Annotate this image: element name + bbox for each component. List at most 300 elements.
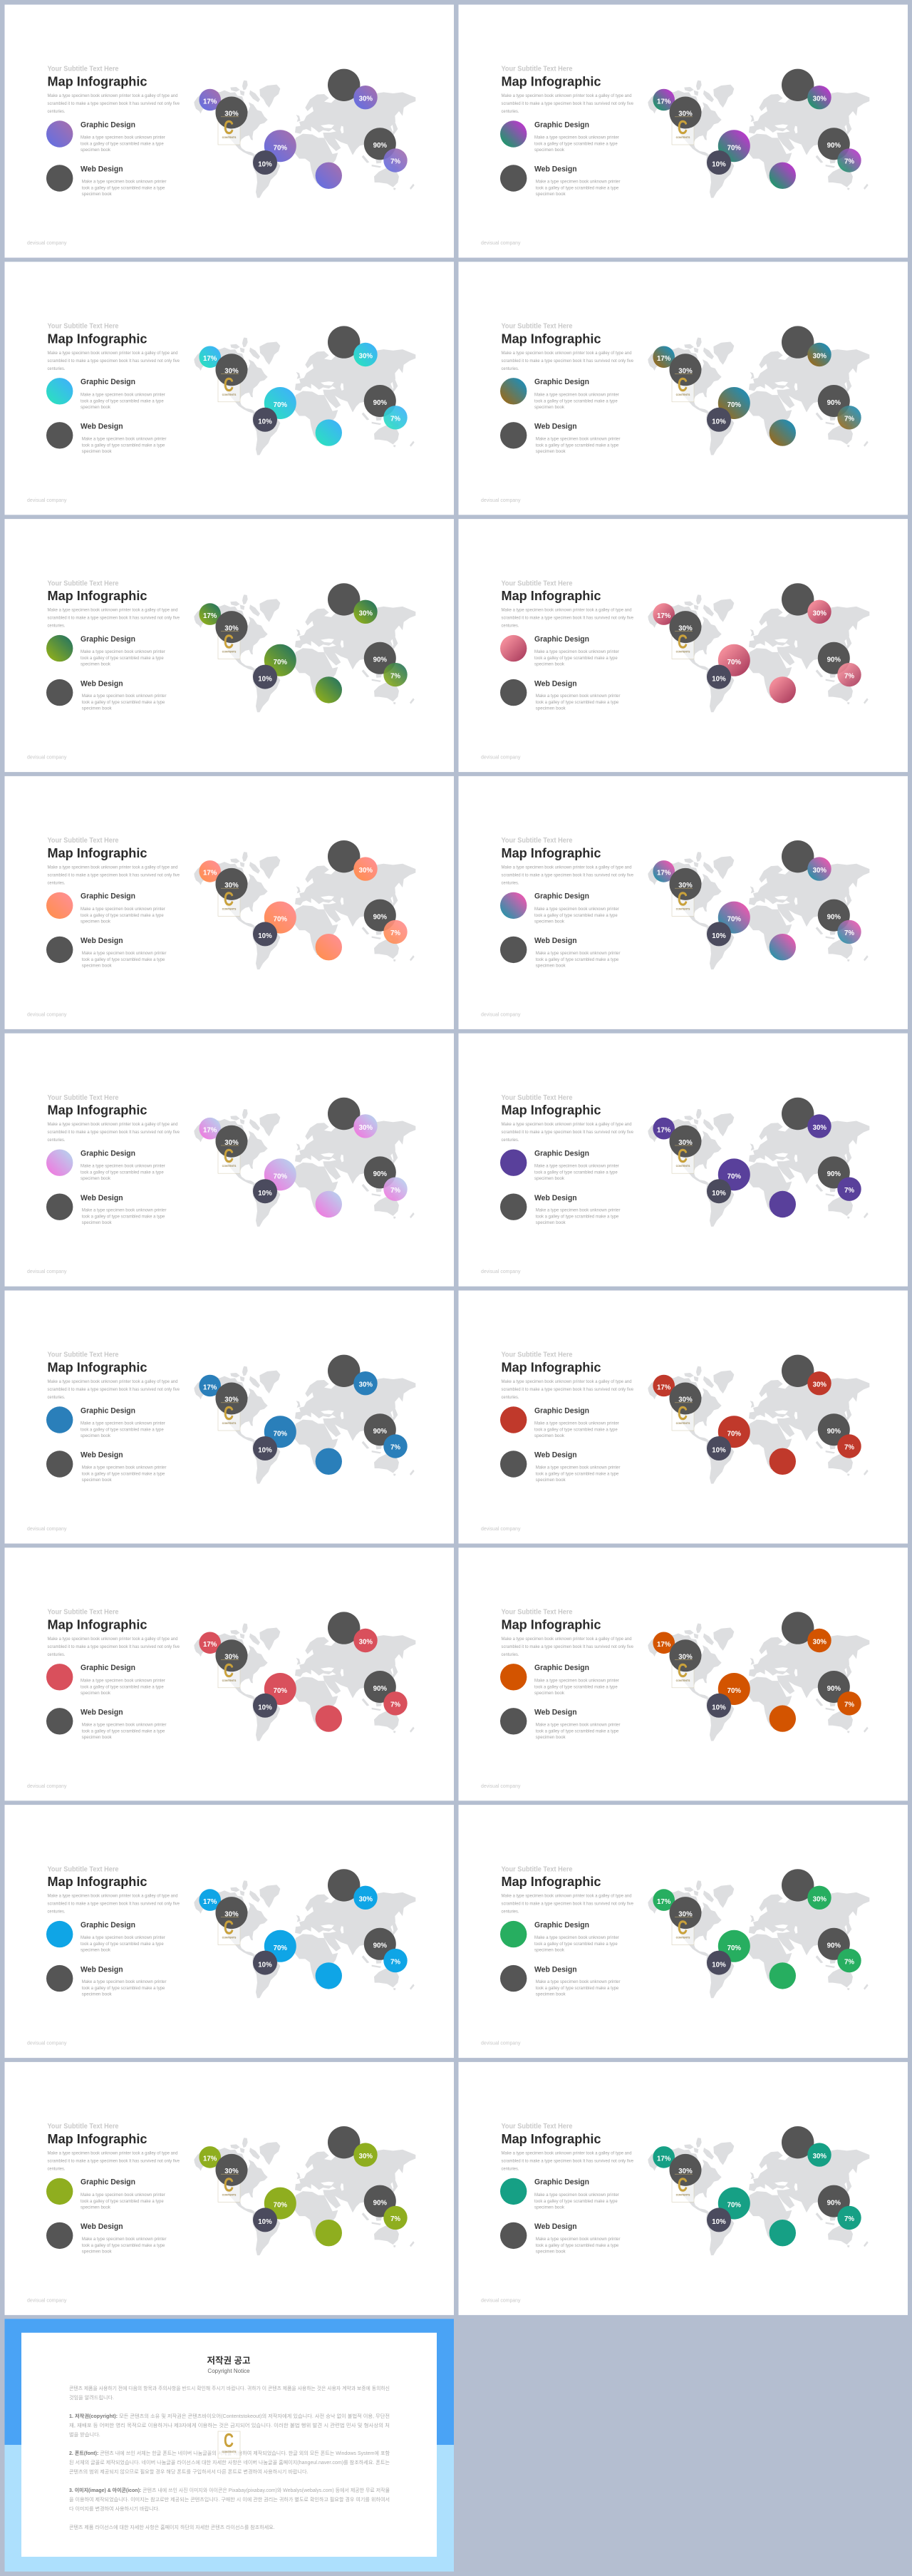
notice section 3: 을 이용하여 제작되었습니다. 이미지는 참고로만 제공되는 콘텐츠입니다. 구매한 시 이에 관한 권리는 귀하가 별도로 확인하고 필요할 경우 여기를 위하여서 bbox=[69, 2496, 390, 2503]
legend: web design: took a galley of type scrambled make a type bbox=[82, 1473, 165, 1477]
watermark logo: C bbox=[678, 631, 688, 653]
world map bbox=[648, 1109, 869, 1227]
legend: web design: took a galley of type scrambled make a type bbox=[536, 443, 619, 448]
legend icon: web design bbox=[500, 1451, 527, 1478]
legend: graphic design: Make a type specimen book unknown printer bbox=[534, 1165, 619, 1169]
legend: graphic design bbox=[81, 635, 165, 667]
legend: graphic design: took a galley of type scrambled make a type bbox=[534, 143, 618, 147]
map bubbles: 70% bbox=[274, 2202, 287, 2210]
legend: graphic design bbox=[534, 1149, 619, 1181]
legend: web design bbox=[81, 679, 167, 711]
map bubbles: 10% bbox=[258, 1961, 272, 1969]
intro text bbox=[502, 1380, 634, 1400]
watermark logo: CONTENTS bbox=[676, 136, 690, 139]
watermark frame bbox=[672, 1403, 694, 1431]
title: Map Infographic bbox=[502, 845, 601, 860]
map bubbles: 30% bbox=[813, 609, 826, 617]
intro text: centuries. bbox=[502, 367, 519, 371]
map bubbles: 7% bbox=[844, 415, 854, 423]
legend: graphic design bbox=[534, 120, 619, 153]
legend: graphic design bbox=[81, 1921, 165, 1953]
map bubbles: 7% bbox=[390, 929, 400, 937]
legend: graphic design bbox=[534, 892, 619, 924]
legend: web design: Make a type specimen book unknown printer bbox=[536, 1209, 620, 1213]
map bubbles: 90% bbox=[827, 142, 841, 150]
watermark logo: CONTENTS bbox=[222, 2193, 237, 2196]
footer: devisual company bbox=[481, 239, 521, 246]
legend: graphic design: Make a type specimen book unknown printer bbox=[534, 2193, 619, 2198]
intro text bbox=[47, 1380, 180, 1400]
legend: graphic design: Make a type specimen book unknown printer bbox=[81, 1679, 165, 1683]
map bubbles: 70% bbox=[274, 1173, 287, 1180]
watermark frame bbox=[218, 2175, 240, 2202]
map bubbles: 90% bbox=[827, 1428, 841, 1436]
map bubbles bbox=[199, 583, 408, 704]
watermark logo: CONTENTS bbox=[222, 393, 237, 396]
panel: slide 16 green bbox=[459, 1805, 908, 2058]
legend icon: web design bbox=[46, 679, 73, 706]
title: Map Infographic bbox=[47, 1360, 147, 1374]
map bubbles: 17% bbox=[203, 1384, 217, 1391]
world map bbox=[648, 337, 869, 455]
intro text: centuries. bbox=[47, 1396, 66, 1400]
intro text: scrambled it to make a type specimen book It has survived not only five bbox=[47, 1645, 180, 1649]
map bubbles: 30% bbox=[813, 352, 826, 360]
legend: graphic design: specimen book bbox=[534, 663, 565, 667]
legend: web design: Web Design bbox=[81, 1709, 123, 1717]
intro text: Make a type specimen book unknown printer took a galley of type and bbox=[47, 2151, 178, 2155]
map bubbles: 17% bbox=[657, 870, 671, 877]
legend: web design: took a galley of type scrambled make a type bbox=[536, 1215, 619, 1220]
legend icon: graphic design bbox=[46, 1406, 73, 1433]
watermark frame bbox=[218, 375, 240, 402]
watermark logo: C bbox=[224, 373, 234, 396]
intro text: centuries. bbox=[47, 367, 66, 371]
notice intro bbox=[69, 2385, 390, 2401]
legend: web design: Make a type specimen book unknown printer bbox=[82, 1980, 167, 1984]
map bubbles: 30% bbox=[224, 1654, 239, 1661]
legend icon: web design bbox=[46, 2222, 73, 2249]
map bubbles: 7% bbox=[390, 415, 400, 423]
world map bbox=[648, 2138, 869, 2255]
legend: graphic design: Graphic Design bbox=[81, 1664, 135, 1672]
map bubbles: 70% bbox=[727, 1430, 741, 1438]
legend icon: graphic design bbox=[46, 1664, 73, 1691]
map bubbles: 70% bbox=[727, 144, 741, 152]
intro text: centuries. bbox=[502, 110, 519, 114]
legend: web design: took a galley of type scrambled make a type bbox=[82, 1215, 165, 1220]
watermark logo: C bbox=[678, 887, 688, 910]
map bubbles: 10% bbox=[712, 1961, 726, 1969]
legend: graphic design: took a galley of type scrambled make a type bbox=[81, 1171, 164, 1175]
panel: slide 2 magenta green gradient bbox=[459, 4, 908, 258]
intro text bbox=[502, 1895, 634, 1915]
map bubbles: 30% bbox=[813, 96, 826, 103]
legend: graphic design: Graphic Design bbox=[81, 120, 135, 129]
title: Map Infographic bbox=[502, 1874, 601, 1889]
watermark logo: CONTENTS bbox=[222, 1165, 237, 1168]
map bubbles: 7% bbox=[844, 158, 854, 166]
intro text: scrambled it to make a type specimen book It has survived not only five bbox=[502, 1902, 634, 1907]
legend: web design: specimen book bbox=[82, 964, 113, 968]
watermark logo: C bbox=[678, 2173, 688, 2195]
legend: web design: Web Design bbox=[81, 1965, 123, 1974]
title: Map Infographic bbox=[47, 2131, 147, 2146]
map bubbles: 30% bbox=[678, 1910, 693, 1918]
intro text: scrambled it to make a type specimen book It has survived not only five bbox=[502, 359, 634, 364]
map bubbles bbox=[199, 1355, 408, 1475]
map bubbles: 7% bbox=[390, 672, 400, 680]
intro text bbox=[47, 1123, 180, 1143]
world map bbox=[648, 81, 869, 198]
map bubbles: 30% bbox=[359, 352, 373, 360]
legend: graphic design bbox=[534, 635, 619, 667]
legend: web design: Make a type specimen book unknown printer bbox=[82, 694, 167, 699]
intro text: Make a type specimen book unknown printer took a galley of type and bbox=[502, 2151, 631, 2155]
map bubbles: 90% bbox=[373, 1428, 387, 1436]
map bubbles: 90% bbox=[827, 913, 841, 921]
legend: graphic design bbox=[534, 1664, 619, 1696]
watermark logo: CONTENTS bbox=[222, 136, 237, 139]
map bubbles: 70% bbox=[727, 659, 741, 666]
legend: graphic design: took a galley of type scrambled make a type bbox=[81, 1685, 164, 1689]
subtitle: Your Subtitle Text Here bbox=[502, 322, 573, 330]
map bubbles: 90% bbox=[373, 399, 387, 407]
intro text: scrambled it to make a type specimen book It has survived not only five bbox=[502, 873, 634, 877]
legend: graphic design: Graphic Design bbox=[534, 1921, 589, 1930]
intro text: Make a type specimen book unknown printer took a galley of type and bbox=[502, 865, 631, 870]
legend icon: web design bbox=[46, 165, 73, 192]
legend: web design bbox=[81, 1451, 167, 1483]
intro text: centuries. bbox=[502, 1910, 519, 1915]
watermark frame bbox=[218, 1661, 240, 1688]
legend: web design: specimen book bbox=[536, 450, 566, 454]
legend: web design: specimen book bbox=[536, 1478, 566, 1483]
map bubbles: 7% bbox=[844, 1958, 854, 1966]
legend: graphic design: Graphic Design bbox=[534, 378, 589, 386]
map bubbles: 30% bbox=[359, 1639, 373, 1647]
map bubbles: 30% bbox=[678, 110, 693, 118]
legend: web design: Make a type specimen book unknown printer bbox=[536, 1723, 620, 1727]
intro text bbox=[502, 609, 634, 629]
map bubbles: 30% bbox=[224, 624, 239, 632]
map bubbles bbox=[199, 326, 408, 446]
notice closing line: 콘텐츠 제품 라이선스에 대한 자세한 사항은 홈페이지 하단의 자세한 콘텐츠 라이선스를 참조하세요. bbox=[69, 2524, 275, 2530]
intro text: Make a type specimen book unknown printer took a galley of type and bbox=[47, 1637, 178, 1642]
notice section 1: 벌을 받습니다. bbox=[69, 2431, 100, 2438]
legend: web design: specimen book bbox=[536, 1993, 566, 1997]
legend: web design: Web Design bbox=[534, 679, 577, 688]
footer: devisual company bbox=[27, 1268, 67, 1274]
map bubbles: 7% bbox=[390, 1444, 400, 1452]
legend icon: web design bbox=[500, 1193, 527, 1220]
legend: web design bbox=[81, 1708, 167, 1740]
intro text: centuries. bbox=[502, 881, 519, 885]
watermark: C bbox=[224, 2429, 234, 2451]
watermark logo: CONTENTS bbox=[222, 907, 237, 910]
panel: slide 13 rose red bbox=[4, 1547, 454, 1800]
intro text bbox=[47, 1895, 180, 1915]
legend: graphic design: Make a type specimen book unknown printer bbox=[81, 1165, 165, 1169]
title: Map Infographic bbox=[502, 1103, 601, 1118]
legend: graphic design bbox=[81, 1149, 165, 1181]
notice section 3: 다 이미지를 변경하여 사용하시기 바랍니다. bbox=[69, 2505, 160, 2512]
legend: web design: Make a type specimen book unknown printer bbox=[536, 1980, 620, 1984]
intro text bbox=[502, 1637, 634, 1657]
legend: graphic design: Graphic Design bbox=[81, 1149, 135, 1158]
legend: graphic design: Make a type specimen book unknown printer bbox=[534, 1936, 619, 1940]
map bubbles: 30% bbox=[678, 367, 693, 375]
intro text: centuries. bbox=[502, 1396, 519, 1400]
legend: web design: Web Design bbox=[81, 1194, 123, 1202]
watermark frame bbox=[218, 1403, 240, 1431]
watermark frame bbox=[672, 1918, 694, 1945]
intro text: Make a type specimen book unknown printer took a galley of type and bbox=[502, 1895, 631, 1899]
legend: web design bbox=[81, 165, 167, 197]
legend: graphic design: specimen book bbox=[534, 406, 565, 410]
map bubbles: 30% bbox=[678, 1139, 693, 1147]
watermark logo: CONTENTS bbox=[222, 1679, 237, 1682]
subtitle: Your Subtitle Text Here bbox=[502, 1865, 573, 1873]
watermark frame bbox=[672, 1146, 694, 1173]
map bubbles: 90% bbox=[373, 1942, 387, 1950]
legend icon: web design bbox=[500, 679, 527, 706]
notice section 2: 콘텐츠의 범위 제공되지 않으므로 필요할 경우 해당 폰트를 구입하셔서 다른 폰트로 변경하여 사용하시기 바랍니다. bbox=[69, 2468, 309, 2475]
intro text: scrambled it to make a type specimen book It has survived not only five bbox=[47, 1130, 180, 1135]
subtitle: Your Subtitle Text Here bbox=[502, 1609, 573, 1617]
watermark logo: C bbox=[224, 2173, 234, 2195]
intro text bbox=[47, 2151, 180, 2171]
legend: web design bbox=[534, 679, 620, 711]
legend: graphic design: Graphic Design bbox=[81, 1921, 135, 1930]
legend: web design: Make a type specimen book unknown printer bbox=[536, 437, 620, 441]
legend: graphic design: Make a type specimen book unknown printer bbox=[81, 907, 165, 912]
legend: web design: Make a type specimen book unknown printer bbox=[82, 180, 167, 184]
panel: slide 15 sky blue bbox=[4, 1805, 454, 2058]
panel: slide 11 blue bbox=[4, 1290, 454, 1544]
watermark frame bbox=[672, 632, 694, 659]
legend: web design: took a galley of type scrambled make a type bbox=[536, 958, 619, 962]
legend: web design: Make a type specimen book unknown printer bbox=[536, 1465, 620, 1470]
map bubbles: 30% bbox=[224, 110, 239, 118]
intro text: scrambled it to make a type specimen book It has survived not only five bbox=[502, 1130, 634, 1135]
map bubbles: 30% bbox=[678, 1654, 693, 1661]
map bubbles: 30% bbox=[813, 1639, 826, 1647]
watermark logo: C bbox=[678, 1659, 688, 1681]
intro text: scrambled it to make a type specimen book It has survived not only five bbox=[502, 2159, 634, 2163]
map bubbles: 70% bbox=[727, 2202, 741, 2210]
legend: web design: specimen book bbox=[82, 450, 113, 454]
watermark frame bbox=[672, 2175, 694, 2202]
panel: slide 18 teal bbox=[459, 2062, 908, 2315]
map bubbles bbox=[653, 69, 861, 189]
legend icon: graphic design bbox=[500, 1406, 527, 1433]
map bubbles: 17% bbox=[203, 355, 217, 363]
legend: graphic design: Graphic Design bbox=[534, 1406, 589, 1415]
legend: web design bbox=[534, 1708, 620, 1740]
legend icon: graphic design bbox=[500, 892, 527, 919]
world map bbox=[194, 337, 415, 455]
map bubbles: 17% bbox=[203, 870, 217, 877]
legend: graphic design: Graphic Design bbox=[81, 1406, 135, 1415]
map bubbles: 17% bbox=[203, 2155, 217, 2163]
notice intro: 것임을 알려드립니다. bbox=[69, 2394, 114, 2401]
legend: web design bbox=[81, 2222, 167, 2254]
map bubbles: 90% bbox=[827, 399, 841, 407]
map bubbles: 30% bbox=[224, 1139, 239, 1147]
legend: web design: Make a type specimen book unknown printer bbox=[536, 180, 620, 184]
intro text: Make a type specimen book unknown printer took a galley of type and bbox=[47, 351, 178, 356]
map bubbles: 7% bbox=[390, 1187, 400, 1195]
legend: graphic design: Graphic Design bbox=[534, 635, 589, 644]
footer: devisual company bbox=[27, 754, 67, 761]
legend: graphic design: specimen book bbox=[534, 1949, 565, 1953]
legend: graphic design bbox=[81, 378, 165, 410]
footer: devisual company bbox=[481, 754, 521, 761]
footer: devisual company bbox=[27, 2040, 67, 2046]
legend: web design bbox=[534, 1194, 620, 1225]
footer: devisual company bbox=[27, 1783, 67, 1789]
legend: graphic design: Graphic Design bbox=[81, 378, 135, 386]
legend: graphic design: specimen book bbox=[534, 2205, 565, 2210]
subtitle: Your Subtitle Text Here bbox=[502, 2123, 573, 2131]
subtitle: Your Subtitle Text Here bbox=[47, 1865, 119, 1873]
map bubbles: 17% bbox=[657, 1126, 671, 1134]
map bubbles: 17% bbox=[203, 1126, 217, 1134]
panel: slide 14 orange bbox=[459, 1547, 908, 1800]
map bubbles: 30% bbox=[813, 1381, 826, 1389]
map bubbles: 10% bbox=[258, 161, 272, 169]
notice section 1: 1. 저작권(copyright): 모든 콘텐츠의 소유 및 저작권은 콘텐츠바이오어(Contentstokeout)의 저작자에게 있습니다. 사전 승낙 없이 불법적 이용, 무단전 bbox=[69, 2413, 390, 2419]
map bubbles: 70% bbox=[274, 401, 287, 409]
legend: web design bbox=[534, 422, 620, 454]
footer: devisual company bbox=[481, 1783, 521, 1789]
legend: web design: specimen book bbox=[536, 707, 566, 711]
intro text bbox=[502, 2151, 634, 2171]
legend: graphic design bbox=[534, 1921, 619, 1953]
legend: web design: Make a type specimen book unknown printer bbox=[82, 1465, 167, 1470]
legend icon: graphic design bbox=[500, 2178, 527, 2205]
map bubbles: 30% bbox=[678, 1396, 693, 1404]
legend: graphic design: took a galley of type scrambled make a type bbox=[534, 656, 618, 661]
intro text: Make a type specimen book unknown printer took a galley of type and bbox=[502, 1637, 631, 1642]
map bubbles: 10% bbox=[712, 1704, 726, 1712]
map bubbles: 30% bbox=[224, 367, 239, 375]
intro text: scrambled it to make a type specimen book It has survived not only five bbox=[47, 359, 180, 364]
watermark logo: C bbox=[224, 1402, 234, 1424]
legend: web design: specimen book bbox=[82, 1478, 113, 1483]
map bubbles: 70% bbox=[274, 144, 287, 152]
map bubbles: 17% bbox=[203, 1641, 217, 1649]
map bubbles bbox=[653, 2126, 861, 2246]
intro text bbox=[47, 609, 180, 629]
title: Map Infographic bbox=[502, 331, 601, 346]
legend: graphic design: specimen book bbox=[534, 919, 565, 924]
panel: slide 7 coral gradient bbox=[4, 776, 454, 1029]
legend: web design: specimen book bbox=[536, 2250, 566, 2254]
world map bbox=[648, 1880, 869, 1998]
legend: graphic design: took a galley of type scrambled make a type bbox=[534, 399, 618, 403]
legend: web design bbox=[534, 165, 620, 197]
subtitle: Your Subtitle Text Here bbox=[47, 1351, 119, 1359]
subtitle: Your Subtitle Text Here bbox=[47, 1094, 119, 1102]
legend icon: web design bbox=[46, 422, 73, 449]
intro text: Make a type specimen book unknown printer took a galley of type and bbox=[47, 1895, 178, 1899]
footer: devisual company bbox=[27, 2297, 67, 2303]
intro text: scrambled it to make a type specimen book It has survived not only five bbox=[47, 1388, 180, 1392]
intro text: centuries. bbox=[502, 1138, 519, 1143]
legend: graphic design bbox=[81, 2178, 165, 2210]
legend icon: graphic design bbox=[500, 635, 527, 661]
watermark logo: C bbox=[224, 1145, 234, 1167]
legend: graphic design: Make a type specimen book unknown printer bbox=[534, 1421, 619, 1426]
subtitle: Your Subtitle Text Here bbox=[502, 579, 573, 587]
map bubbles: 10% bbox=[712, 161, 726, 169]
legend: graphic design: took a galley of type scrambled make a type bbox=[534, 1171, 618, 1175]
legend: graphic design: Make a type specimen book unknown printer bbox=[81, 135, 165, 140]
world map bbox=[194, 1366, 415, 1484]
watermark logo: CONTENTS bbox=[676, 1422, 690, 1425]
legend: web design bbox=[81, 1194, 167, 1225]
legend: graphic design bbox=[81, 1664, 165, 1696]
watermark logo: CONTENTS bbox=[676, 393, 690, 396]
map bubbles: 30% bbox=[224, 1910, 239, 1918]
map bubbles bbox=[199, 1612, 408, 1732]
map bubbles: 30% bbox=[813, 1124, 826, 1132]
legend: web design: Make a type specimen book unknown printer bbox=[536, 952, 620, 956]
legend: graphic design bbox=[534, 1406, 619, 1438]
world map bbox=[194, 1109, 415, 1227]
legend: web design: Make a type specimen book unknown printer bbox=[82, 437, 167, 441]
legend: graphic design: took a galley of type scrambled make a type bbox=[534, 914, 618, 918]
map bubbles: 17% bbox=[203, 98, 217, 105]
intro text bbox=[502, 351, 634, 371]
intro text: scrambled it to make a type specimen book It has survived not only five bbox=[47, 102, 180, 106]
map bubbles: 30% bbox=[813, 1895, 826, 1903]
legend icon: graphic design bbox=[46, 378, 73, 405]
map bubbles bbox=[199, 1869, 408, 1989]
legend: graphic design: took a galley of type scrambled make a type bbox=[81, 143, 164, 147]
legend: web design bbox=[81, 937, 167, 968]
footer: devisual company bbox=[481, 2040, 521, 2046]
legend: web design bbox=[81, 1965, 167, 1997]
intro text: scrambled it to make a type specimen book It has survived not only five bbox=[502, 102, 634, 106]
watermark frame bbox=[672, 118, 694, 145]
intro text: Make a type specimen book unknown printer took a galley of type and bbox=[47, 1380, 178, 1384]
intro text bbox=[502, 865, 634, 885]
map bubbles: 90% bbox=[827, 1170, 841, 1178]
subtitle: Your Subtitle Text Here bbox=[47, 1609, 119, 1617]
map bubbles: 70% bbox=[274, 916, 287, 924]
watermark logo: C bbox=[678, 1145, 688, 1167]
legend icon: web design bbox=[500, 165, 527, 192]
intro text: Make a type specimen book unknown printer took a galley of type and bbox=[47, 1123, 178, 1127]
watermark logo: C bbox=[224, 116, 234, 138]
intro text: scrambled it to make a type specimen book It has survived not only five bbox=[502, 1388, 634, 1392]
legend: graphic design: Graphic Design bbox=[534, 1664, 589, 1672]
legend: web design: specimen book bbox=[536, 1736, 566, 1740]
panel: slide 8 pink teal gradient bbox=[459, 776, 908, 1029]
watermark frame bbox=[218, 889, 240, 916]
watermark logo: C bbox=[678, 1402, 688, 1424]
intro text: Make a type specimen book unknown printer took a galley of type and bbox=[502, 94, 631, 98]
legend: graphic design: Make a type specimen book unknown printer bbox=[534, 650, 619, 654]
intro text bbox=[47, 94, 180, 114]
legend icon: graphic design bbox=[46, 1149, 73, 1176]
legend: web design: Make a type specimen book unknown printer bbox=[82, 1723, 167, 1727]
legend: graphic design: specimen book bbox=[81, 1434, 111, 1438]
intro text bbox=[502, 1123, 634, 1143]
